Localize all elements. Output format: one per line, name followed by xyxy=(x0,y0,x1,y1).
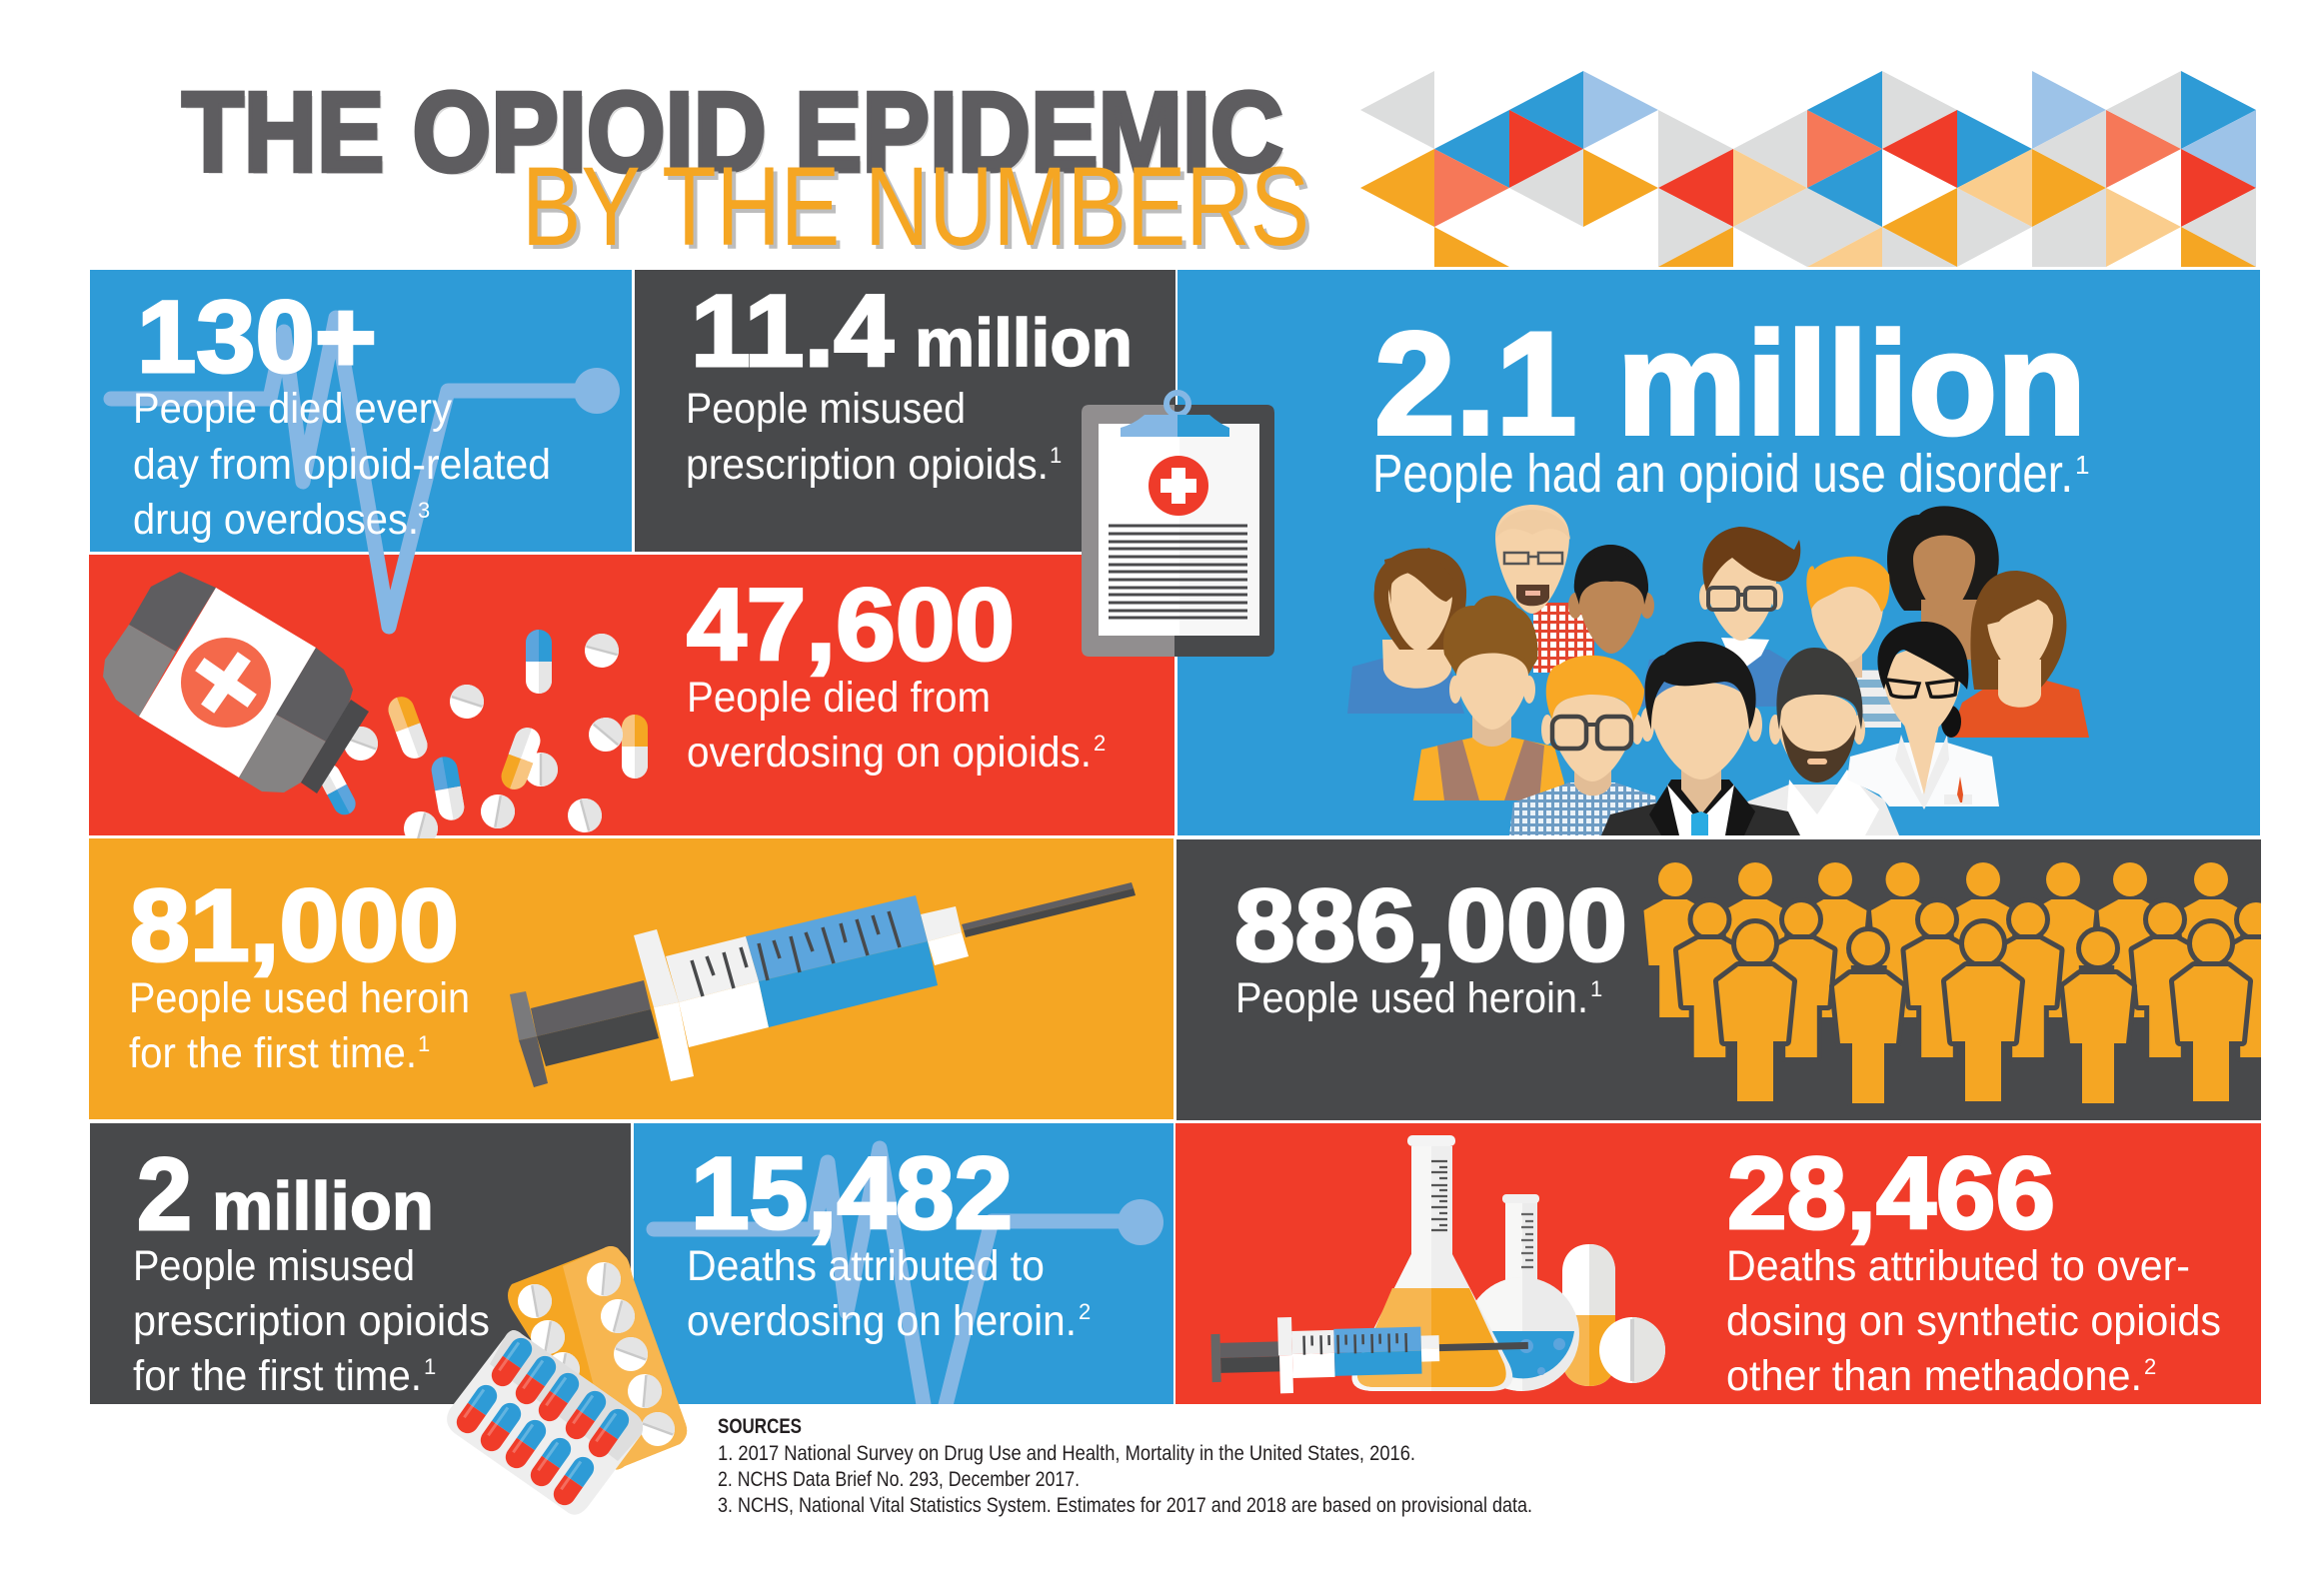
sources xyxy=(718,1415,1532,1517)
woman in blue xyxy=(1347,548,1466,714)
man with orange hair, striped shirt xyxy=(1806,557,1901,728)
caption: heroin first time: People used heroin xyxy=(129,974,470,1022)
caption: died from overdosing xyxy=(687,674,1106,777)
man in suit xyxy=(1601,642,1800,835)
icon: syringe xyxy=(510,882,1136,1087)
icon: blister packs xyxy=(447,1246,687,1515)
decorative triangle pattern xyxy=(1360,71,2256,267)
woman with brown hair, orange top xyxy=(1949,571,2089,738)
caption: deaths heroin: Deaths attributed to xyxy=(687,1242,1045,1290)
man with brown quiff xyxy=(1639,527,1800,707)
caption: misused first time: 1 xyxy=(424,1354,436,1379)
caption: synthetic opioids: Deaths attributed to over- xyxy=(1726,1242,2190,1290)
caption: misused first time xyxy=(133,1242,490,1400)
caption: used heroin: 1 xyxy=(1590,976,1602,1001)
bald man xyxy=(1495,505,1594,673)
caption: misused prescription opioids: prescription opioids. xyxy=(686,441,1049,489)
woman with black hair xyxy=(1887,506,1999,660)
caption: misused prescription opioids xyxy=(686,385,1062,489)
stat: 2 million: 2 xyxy=(137,1137,192,1251)
panel: 11.4 million xyxy=(635,270,1175,552)
icon: clipboard xyxy=(1082,393,1274,657)
stat: 28,466: 28,466 xyxy=(1727,1136,2055,1250)
panel: 2 million xyxy=(90,1123,631,1404)
stat: 81,000: 81,000 xyxy=(130,868,459,982)
sources: SOURCES xyxy=(718,1415,802,1438)
stat and caption: 130+: drug overdoses. xyxy=(133,496,419,544)
panel: 15,482 xyxy=(634,1123,1173,1404)
sources: 1. 2017 National Survey on Drug Use and Health, Mortality in the United States, 2016. xyxy=(718,1442,1415,1465)
stat and caption: 130+: day from opioid-related xyxy=(133,441,551,489)
man with dark skin xyxy=(1568,545,1654,654)
stat and caption: 130+: 130+ xyxy=(137,280,377,394)
caption: misused first time: prescription opioids xyxy=(133,1297,490,1345)
stat: 2.1 million: 2.1 million xyxy=(1374,302,2086,465)
caption: synthetic opioids xyxy=(1726,1242,2221,1400)
stat: 47,600: 47,600 xyxy=(687,568,1015,682)
stat and caption: 130+: 3 xyxy=(418,498,430,523)
caption: misused first time: People misused xyxy=(133,1242,415,1290)
small syringe xyxy=(1210,1311,1529,1395)
caption: synthetic opioids: other than methadone. xyxy=(1726,1352,2142,1400)
title: THE OPIOID EPIDEMIC xyxy=(185,72,1286,198)
caption: deaths heroin xyxy=(687,1242,1091,1345)
heartbeat line xyxy=(646,1141,1163,1404)
caption: heroin first time xyxy=(129,974,470,1077)
panel: 11.4 million: million xyxy=(915,305,1133,381)
caption: opioid use disorder: 1 xyxy=(2075,450,2089,480)
caption: died from overdosing: 2 xyxy=(1094,731,1106,756)
panel: 2 million: million xyxy=(212,1168,434,1244)
caption: misused prescription opioids: 1 xyxy=(1050,443,1062,468)
caption: synthetic opioids: dosing on synthetic opioids xyxy=(1726,1297,2221,1345)
caption: deaths heroin: overdosing on heroin. xyxy=(687,1297,1077,1345)
panel: 81,000 xyxy=(89,838,1173,1119)
caption: used heroin: People used heroin. xyxy=(1235,974,1588,1022)
caption: died from overdosing: People died from xyxy=(687,674,991,722)
illustration: crowd of people xyxy=(1347,505,2089,835)
icon: lab flasks, capsule and syringe xyxy=(1210,1135,1665,1395)
caption: deaths heroin: 2 xyxy=(1079,1299,1091,1324)
caption: misused prescription opioids: People misused xyxy=(686,385,966,433)
stat and caption: 130+ xyxy=(133,280,551,544)
title xyxy=(182,69,1313,273)
title: THE OPIOID EPIDEMIC xyxy=(182,69,1283,195)
man with curly hair and suspenders xyxy=(1413,596,1564,800)
stat: 886,000: 886,000 xyxy=(1234,868,1627,982)
heartbeat line: 130+ panel xyxy=(111,318,620,627)
stat and caption: 130+: People died every xyxy=(133,385,452,433)
man with shirt and beard xyxy=(1745,648,1899,835)
caption: opioid use disorder: People had an opioid use disorder. xyxy=(1372,444,2073,504)
woman with glasses in white coat xyxy=(1847,622,1999,809)
caption: heroin first time: 1 xyxy=(418,1031,430,1056)
caption: died from overdosing: overdosing on opioids. xyxy=(687,729,1092,777)
icon: spilled pill bottle xyxy=(103,572,648,849)
panel: 886,000 xyxy=(1176,839,2287,1120)
panel: 28,466 xyxy=(1175,1123,2261,1404)
icon: rows of people silhouettes xyxy=(1643,862,2287,1103)
caption: misused first time: for the first time. xyxy=(133,1352,422,1400)
sources: 3. NCHS, National Vital Statistics System. Estimates for 2017 and 2018 are based on provisional data. xyxy=(718,1494,1532,1517)
title: BY THE NUMBERS xyxy=(522,144,1309,269)
title: BY THE NUMBERS xyxy=(526,148,1313,273)
caption: heroin first time: for the first time. xyxy=(129,1029,417,1077)
man with orange hair and glasses xyxy=(1509,656,1656,835)
stat: 11.4 million: 11.4 xyxy=(691,274,894,388)
caption: synthetic opioids: 2 xyxy=(2144,1354,2156,1379)
panel: 130+ xyxy=(90,270,632,552)
sources: 2. NCHS Data Brief No. 293, December 2017. xyxy=(718,1468,1080,1491)
panel: 47,600 xyxy=(89,555,1174,835)
panel: 2.1 million xyxy=(1177,270,2260,835)
stat: 15,482: 15,482 xyxy=(691,1136,1013,1250)
